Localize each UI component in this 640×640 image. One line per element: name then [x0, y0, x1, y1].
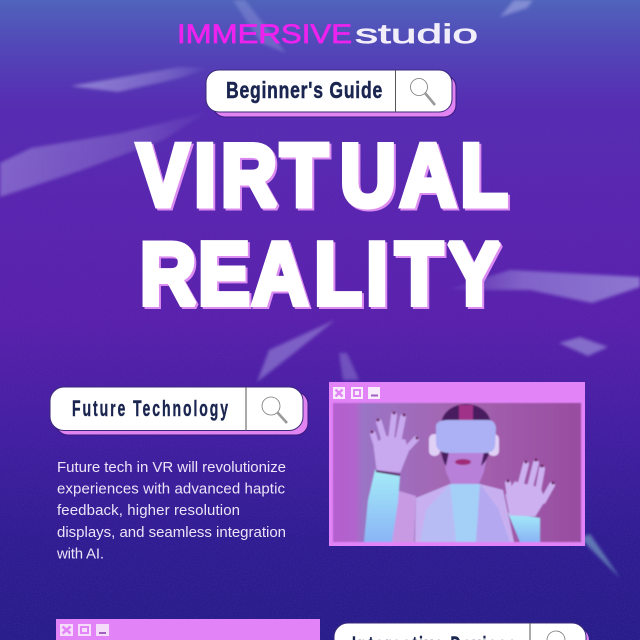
search pill: Interactive Devices (cropped) — [334, 623, 589, 640]
right sleeve — [508, 513, 540, 542]
text block: future technology description: Future tech in VR will revolutionize — [57, 459, 286, 476]
VR headset — [436, 420, 496, 453]
icon: magnifier — [262, 397, 287, 423]
title: Virtual Reality: VIRTUAL — [137, 126, 508, 225]
neck and face — [443, 450, 488, 486]
icon: magnifier — [410, 78, 435, 105]
left sleeve — [364, 470, 400, 542]
left hand — [373, 415, 416, 472]
title: Virtual Reality — [137, 126, 510, 325]
hair — [441, 404, 491, 446]
window panel: VR photo — [329, 382, 585, 546]
text block: future technology description: with AI. — [56, 546, 104, 562]
search pill: Beginner's Guide — [206, 70, 456, 117]
search pill: Future Technology — [50, 387, 308, 435]
window panel: second photo (cropped) — [56, 619, 320, 640]
title: Virtual Reality: REALITY — [140, 224, 500, 323]
pill label: Future Technology — [72, 396, 230, 421]
headphones — [429, 434, 440, 456]
logo: IMMERSIVE — [177, 19, 352, 49]
arm — [388, 490, 416, 542]
window controls — [60, 624, 109, 636]
logo: studio — [355, 19, 478, 49]
text block: future technology description — [56, 459, 286, 562]
title: Virtual Reality: VIRTUAL — [139, 128, 510, 227]
left hand nails — [370, 412, 418, 440]
window controls — [333, 387, 380, 399]
text block: future technology description: feedback, higher resolution — [57, 502, 240, 519]
text block: future technology description: displays, and seamless integration — [57, 524, 286, 541]
title: Virtual Reality: REALITY — [142, 226, 502, 325]
right hand — [506, 463, 552, 516]
logo — [177, 19, 478, 49]
icon: magnifier — [547, 631, 565, 640]
pill label: Beginner's Guide — [226, 77, 383, 103]
text block: future technology description: experiences with advanced haptic — [57, 480, 286, 498]
right hand nails — [506, 458, 554, 484]
photo: person with VR headset — [333, 403, 581, 542]
torso: white jacket — [415, 484, 514, 542]
